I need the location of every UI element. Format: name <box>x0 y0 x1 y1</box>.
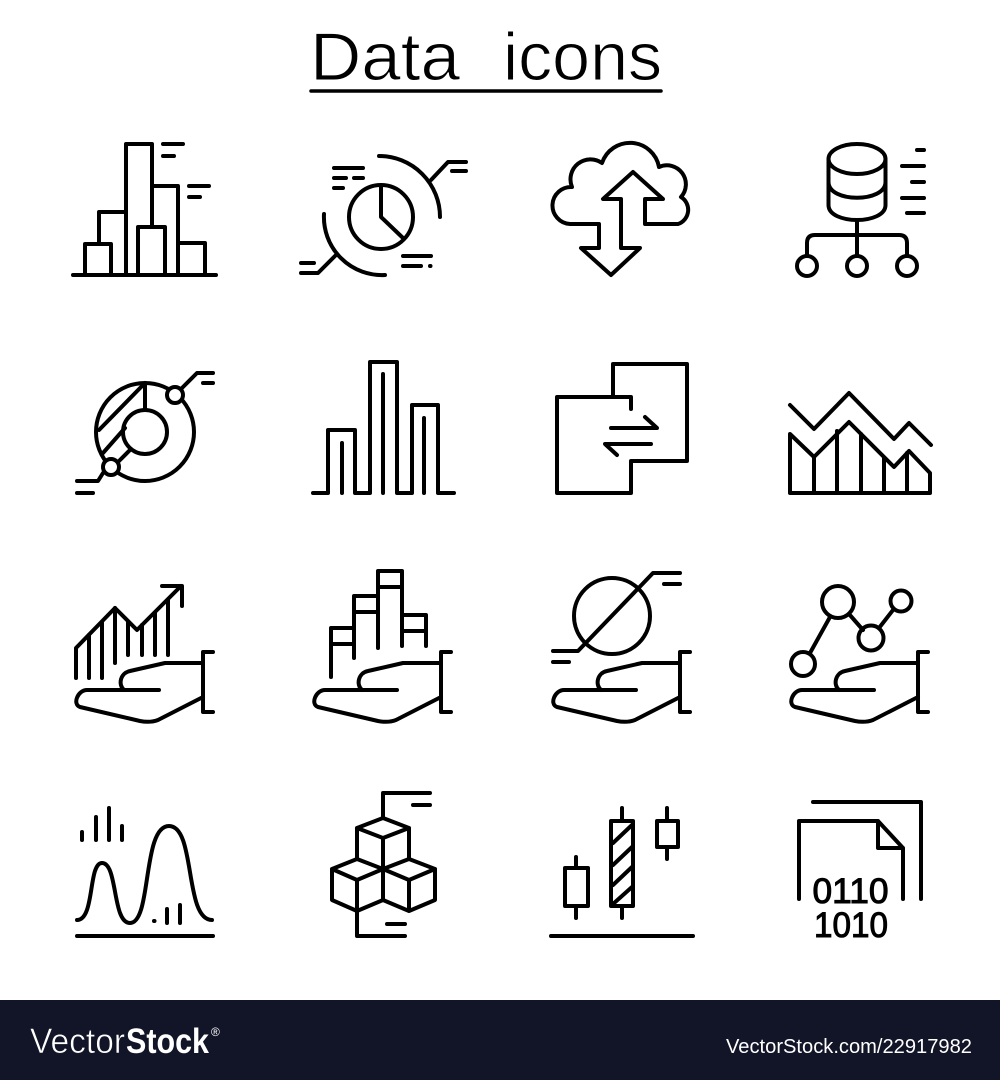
icon: candlestick chart <box>551 808 693 936</box>
image id: VectorStock.com/22917982 <box>726 1036 972 1058</box>
title: Data icons: Data <box>310 19 460 95</box>
icon: cloud upload and download arrows <box>552 143 688 275</box>
icon: distribution curve <box>77 808 213 936</box>
footer bar <box>0 1000 1000 1080</box>
icon: bar chart with labels <box>73 144 216 275</box>
icon: stacked cubes <box>332 793 435 936</box>
hand <box>314 652 451 722</box>
icon: stepped bars over hand <box>314 571 451 722</box>
VectorStock logo <box>30 1022 220 1061</box>
VectorStock logo: Vector <box>30 1022 125 1061</box>
title: Data icons: icons <box>503 19 662 95</box>
VectorStock logo: ® <box>211 1025 220 1039</box>
icon: declining line area chart <box>790 393 931 493</box>
icon: binary data file: 1010 <box>814 906 888 945</box>
icon: connected nodes over hand <box>791 586 928 722</box>
icon: donut chart with connectors <box>77 373 213 493</box>
hand <box>791 652 928 722</box>
icon: documents exchange <box>557 364 687 493</box>
hand <box>553 652 690 722</box>
title: Data icons <box>310 19 662 95</box>
binary digits: 0110 <box>812 872 888 911</box>
icon: histogram bars <box>313 362 454 493</box>
VectorStock logo: Stock <box>126 1022 209 1061</box>
icon: pie chart with orbit arcs <box>301 156 466 275</box>
icon: binary data file <box>799 802 921 945</box>
icon: circle with diagonal over hand <box>553 573 690 722</box>
icon: growth chart over hand <box>76 586 213 722</box>
hand <box>76 652 213 722</box>
icon: database with network nodes <box>797 144 924 276</box>
